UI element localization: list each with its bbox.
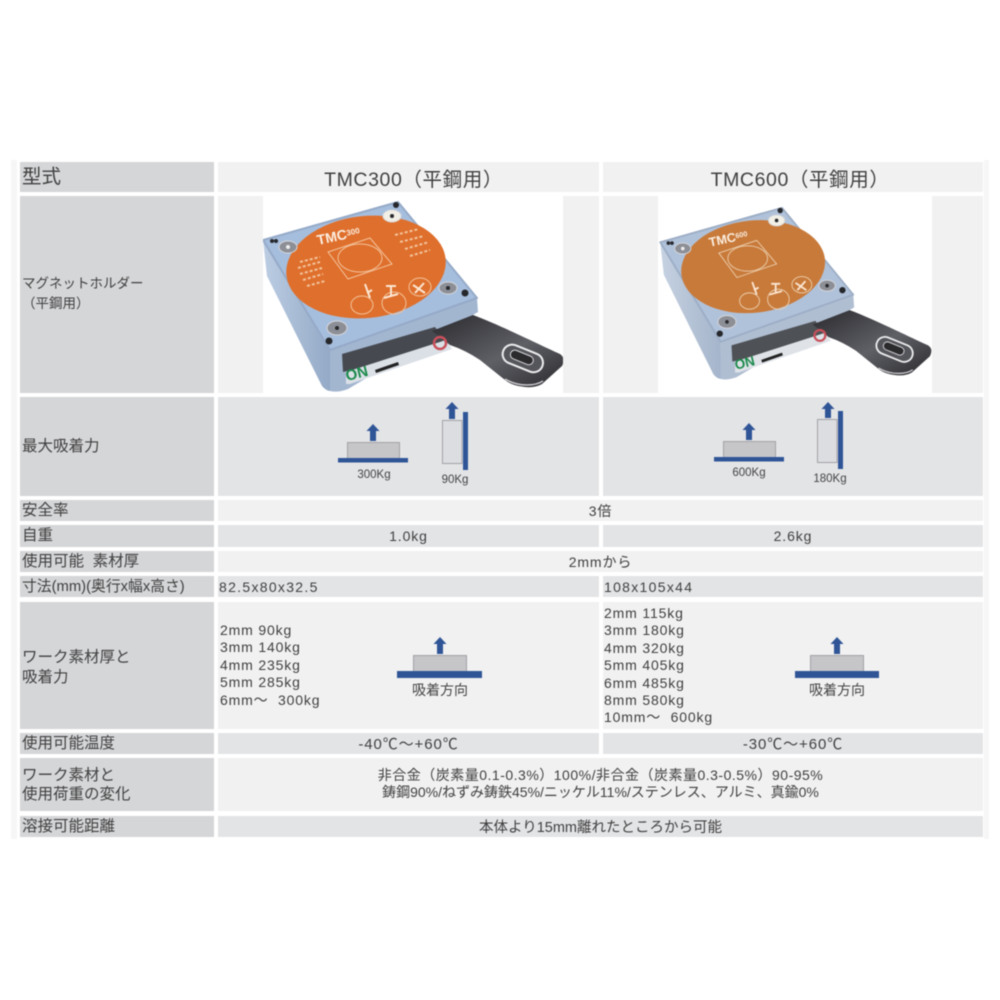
list: TMC300 thickness to force: 2mm 90kg [220,622,292,638]
value: TMC300 weight [218,525,599,547]
list: TMC300 thickness to force [220,622,320,709]
row: safety factor [20,500,983,522]
product illustration: TMC300 magnet holder [262,196,564,393]
row label: safety factor [20,500,214,521]
list: TMC600 thickness to force [604,605,713,726]
value: TMC600 temperature: -30℃～+60℃ [743,736,843,753]
top face [660,208,853,342]
cell TMC300 force list [218,602,599,729]
product illustration: TMC600 magnet holder [658,196,932,393]
list: TMC600 thickness to force: 5mm 405kg [604,657,685,673]
value: thickness [218,551,983,572]
disc model text: 600 [735,229,748,240]
value: TMC600 dimensions [603,576,983,597]
value: TMC300 dimensions [218,576,599,597]
diagram: TMC600 holding direction [794,636,880,700]
row label: weight: 自重 [22,527,53,544]
diagram: TMC600 flat and vertical holding force [713,402,847,486]
row label: thickness [20,551,214,572]
row: usable temperature [20,732,984,754]
cell TMC600 force list [603,602,983,729]
row label: work thickness [20,602,214,729]
row: dimensions [20,576,984,598]
photo cell TMC600 background [603,196,983,393]
row label: work material: ワーク素材と [22,766,115,784]
table header row: model names [20,162,983,192]
model name TMC300 [218,162,599,192]
row: work thickness and holding force [20,602,983,730]
list: TMC600 thickness to force: 8mm 580kg [604,692,685,708]
flat lift diagram 600Kg: 600Kg [732,467,766,479]
value: TMC300 temperature [218,733,599,754]
ON marking and red indicator: ON [733,353,756,373]
orange label disc [677,213,830,320]
value: TMC300 temperature: -40℃～+60℃ [358,736,459,753]
row: usable material thickness [20,550,983,572]
row label: work material [20,758,214,811]
left side face [660,242,722,379]
value: TMC600 weight: 2.6kg [774,528,812,544]
list: TMC300 thickness to force: 6mm～ 300kg [220,692,320,708]
vertical lift diagram 90Kg [442,402,468,486]
list: TMC300 thickness to force: 4mm 235kg [220,657,301,673]
vertical lift diagram 180Kg [813,402,847,485]
force cell TMC600 [603,397,983,496]
row label: max force [20,397,214,496]
row label: magnet holder: マグネットホルダー [22,276,144,290]
diagram: TMC300 holding direction: 吸着方向 [412,680,468,700]
row label: temperature [20,733,214,754]
disc printed details [298,229,431,314]
row label: magnet holder: （平鋼用） [22,296,90,310]
model name TMC600 [603,162,983,192]
mounting screws [270,202,468,344]
disc printed details [719,240,812,309]
mounting screws [667,208,846,337]
row label: model: 型式 [22,166,61,188]
row label: temperature: 使用可能温度 [22,734,115,752]
list: TMC300 thickness to force: 3mm 140kg [220,639,301,655]
vertical lift diagram 90Kg: 90Kg [442,474,468,486]
force cell TMC300 [218,397,599,496]
front face [330,298,478,392]
value: TMC300 dimensions: 82.5x80x32.5 [219,578,319,594]
value: TMC600 weight [603,525,983,547]
row: magnet holder product photos [20,196,983,394]
value: TMC300 weight: 1.0kg [389,528,428,544]
row label: weld distance [20,816,214,837]
row label: dimensions: 寸法(mm)(奥行x幅x高さ) [22,578,185,594]
row label: weight [20,525,214,547]
row: weldable distance [20,816,984,838]
value: safety factor: 3倍 [589,502,612,518]
flat lift diagram 300Kg [338,424,408,481]
row label: magnet holder [20,196,214,393]
row: self weight [20,524,984,548]
value: material load percentages: 非合金（炭素量0.1-0.3%）100%/非合金（炭素量0.3-0.5%）90-95% [378,766,823,782]
ON marking and red indicator: ON [344,363,370,385]
row label: work thickness: 吸着力 [22,668,69,686]
value: TMC600 temperature [603,733,983,754]
row: maximum holding force [20,396,984,496]
diagram: TMC300 holding direction [396,636,483,700]
value: material load percentages: 鋳鋼90%/ねずみ鋳鉄45%/ニッケル11%/ステンレス、アルミ、真鍮0% [382,784,819,800]
flat lift diagram 600Kg [714,423,784,479]
row label: weld distance: 溶接可能距離 [22,818,115,834]
row label: work thickness: ワーク素材厚と [22,648,131,666]
disc model text: 300 [346,226,361,238]
value: weld distance [218,816,983,837]
flat lift diagram 300Kg: 300Kg [357,469,391,481]
disc model text: TMC [315,226,348,248]
value: TMC600 dimensions: 108x105x44 [604,578,693,594]
row label: safety factor: 安全率 [22,502,69,518]
model name TMC300: TMC300（平鋼用） [324,168,503,190]
row: work material and load change [20,758,983,812]
diagram: TMC300 flat and vertical holding force [337,402,469,486]
list: TMC600 thickness to force: 4mm 320kg [604,640,685,656]
row label: max force: 最大吸着力 [22,438,100,454]
list: TMC600 thickness to force: 2mm 115kg [604,605,684,621]
front face [721,295,854,379]
list: TMC300 thickness to force: 5mm 285kg [220,674,301,690]
list: TMC600 thickness to force: 6mm 485kg [604,675,685,691]
diagram: TMC600 holding direction: 吸着方向 [809,680,865,700]
list: TMC600 thickness to force: 10mm～ 600kg [604,709,713,725]
disc model text: TMC [708,230,737,250]
value: weld distance: 本体より15mm離れたところから可能 [479,820,722,836]
row label: thickness: 使用可能 素材厚 [22,552,139,570]
row label: work material: 使用荷重の変化 [22,786,131,802]
photo cell TMC300 background [218,196,599,393]
row label: dimensions [20,576,214,597]
row label: model [20,162,214,192]
value: safety factor [218,500,983,521]
handle [432,315,564,387]
model name TMC600: TMC600（平鋼用） [711,168,889,190]
list: TMC600 thickness to force: 3mm 180kg [604,622,685,638]
orange label disc [281,208,451,326]
vertical lift diagram 180Kg: 180Kg [813,473,847,485]
top face [263,202,477,350]
value: material load percentages [218,758,983,811]
value: thickness: 2mmから [569,554,632,570]
left side face [263,240,331,391]
handle [813,310,931,375]
